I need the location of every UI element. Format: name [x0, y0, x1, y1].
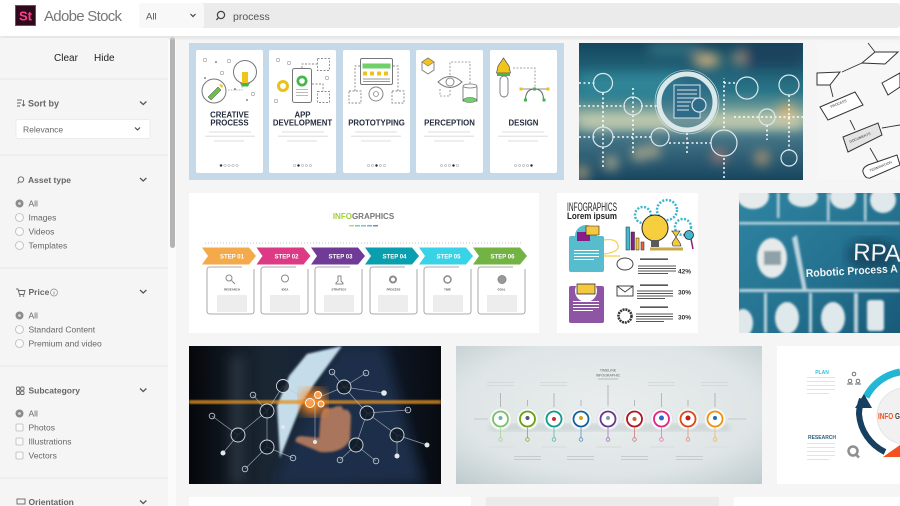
percentages [678, 268, 691, 322]
filter: sort by: Relevance [23, 124, 63, 134]
icon: magnifier [848, 446, 859, 458]
filter: subcategory: All [28, 408, 38, 418]
step labels: RESEARCH [224, 288, 240, 292]
step 6 arrow [473, 248, 527, 264]
step 3 arrow [311, 248, 365, 264]
filter: asset type: Asset type [28, 175, 71, 185]
step 5 arrow: STEP 05 [437, 254, 461, 260]
step boxes [207, 267, 525, 314]
card: creative process: PROCESS [210, 118, 249, 128]
filter: sort by [16, 98, 150, 138]
search bar [139, 3, 900, 28]
infographic title: INFOGRAPHICS [333, 212, 395, 221]
arrow rules [640, 258, 668, 308]
clear and hide buttons: Hide [94, 53, 115, 64]
infographic heading: INFOGRAPHICS [567, 200, 617, 214]
thumbnail: circular info graphic [777, 346, 900, 484]
thumbnail: colourful bulb infographic [557, 193, 698, 333]
filter: price: Price [28, 287, 50, 297]
step 3 arrow: STEP 03 [329, 254, 353, 260]
thumbnail: document network photo [576, 43, 803, 180]
network dotted lines [579, 78, 803, 178]
clear and hide buttons [54, 53, 115, 64]
search bar: All [146, 12, 157, 22]
filter: sort by: Sort by [28, 98, 59, 108]
step labels [224, 288, 506, 292]
step 2 arrow [256, 248, 310, 264]
thumbnail: flowchart photo [817, 43, 900, 180]
step 1 arrow: STEP 01 [220, 254, 245, 260]
filter: price: All [28, 310, 38, 320]
filter: subcategory: Photos [28, 422, 55, 432]
step 1 arrow [202, 248, 256, 264]
filter: asset type: Images [28, 212, 56, 222]
sidebar scrollbar [168, 37, 176, 506]
card: design [490, 50, 557, 173]
filter: asset type: All [28, 198, 38, 208]
card: app development: APP [294, 110, 311, 120]
thumbnail: five onboarding cards [189, 43, 564, 180]
thumbnail: RPA keyboard photo [733, 183, 900, 337]
thumbnail: businessman touching network photo [189, 346, 441, 484]
brand name: Adobe Stock [44, 8, 122, 25]
shirt [277, 346, 342, 458]
percentages: 30% [678, 290, 691, 296]
card: creative process: CREATIVE [210, 110, 249, 120]
thumbnails: partial fourth row [189, 497, 900, 506]
step labels: STRATEGY [331, 288, 347, 292]
filter: price [16, 287, 146, 348]
step labels: TIME [444, 288, 451, 292]
step 4 arrow [365, 248, 419, 264]
ring segments [859, 372, 900, 452]
panel: filter sidebar [0, 38, 168, 506]
timeline heading [596, 368, 621, 378]
thumbnail: timeline infographic [456, 346, 762, 484]
card: app development: DEVELOPMENT [273, 118, 332, 128]
card: perception: PERCEPTION [424, 118, 475, 128]
filter: subcategory: Illustrations [28, 436, 72, 446]
step 4 arrow: STEP 04 [383, 254, 407, 260]
search bar: process [233, 11, 270, 23]
thumbnail: flowchart photo: TERMINATION [869, 160, 893, 173]
filter: price: Premium and video [28, 338, 102, 348]
percentage text lines [636, 266, 676, 322]
percentages: 30% [678, 314, 691, 322]
card: creative process [196, 50, 263, 173]
filter: subcategory: Vectors [28, 450, 57, 460]
thumbnail: flowchart photo: PROCESS [830, 99, 848, 109]
timeline captions [487, 382, 730, 460]
filter: orientation [17, 497, 146, 506]
infographic heading: Lorem ipsum [567, 211, 617, 221]
timeline stems [499, 427, 717, 441]
card: app development [269, 50, 336, 173]
RPA label: RPA [853, 239, 900, 268]
card: perception [416, 50, 483, 173]
gear icon [618, 310, 632, 322]
infographic heading [567, 200, 617, 221]
filter: asset type: Videos [28, 226, 54, 236]
thumbnail: step infographic [189, 193, 539, 333]
percentages: 42% [678, 268, 691, 276]
timeline nodes [490, 408, 726, 430]
card: design: DESIGN [509, 118, 539, 128]
filter: asset type [16, 175, 146, 250]
thumbnail: flowchart photo: DOCUMENTS [849, 132, 872, 144]
icon: Adobe Stock logo [16, 6, 36, 26]
brain icon [617, 258, 633, 270]
step labels: PROCESS [387, 288, 400, 292]
filter: subcategory [16, 386, 146, 460]
hand [296, 406, 351, 452]
card: prototyping [343, 50, 410, 173]
step labels: GOAL [497, 288, 506, 292]
step body lines [217, 295, 517, 312]
envelope icon [617, 286, 633, 296]
step 6 arrow: STEP 06 [491, 254, 515, 260]
filter: asset type: Templates [28, 240, 67, 250]
research label: RESEARCH [808, 435, 836, 441]
header bar [0, 0, 900, 38]
timeline heading: INFOGRAPHIC [596, 374, 621, 378]
timeline heading: TIMELINE [600, 368, 617, 372]
icon: people [847, 372, 861, 384]
step 2 arrow: STEP 02 [275, 254, 299, 260]
card: prototyping: PROTOTYPING [348, 118, 405, 128]
plan label: PLAN [815, 370, 829, 376]
icon: Adobe Stock logo: St [19, 8, 33, 24]
filter: subcategory: Subcategory [28, 386, 80, 396]
step 5 arrow [419, 248, 473, 264]
clear and hide buttons: Clear [54, 53, 79, 64]
filter: price: Standard Content [28, 324, 96, 334]
step labels: IDEA [282, 288, 288, 292]
step icons [226, 275, 506, 284]
